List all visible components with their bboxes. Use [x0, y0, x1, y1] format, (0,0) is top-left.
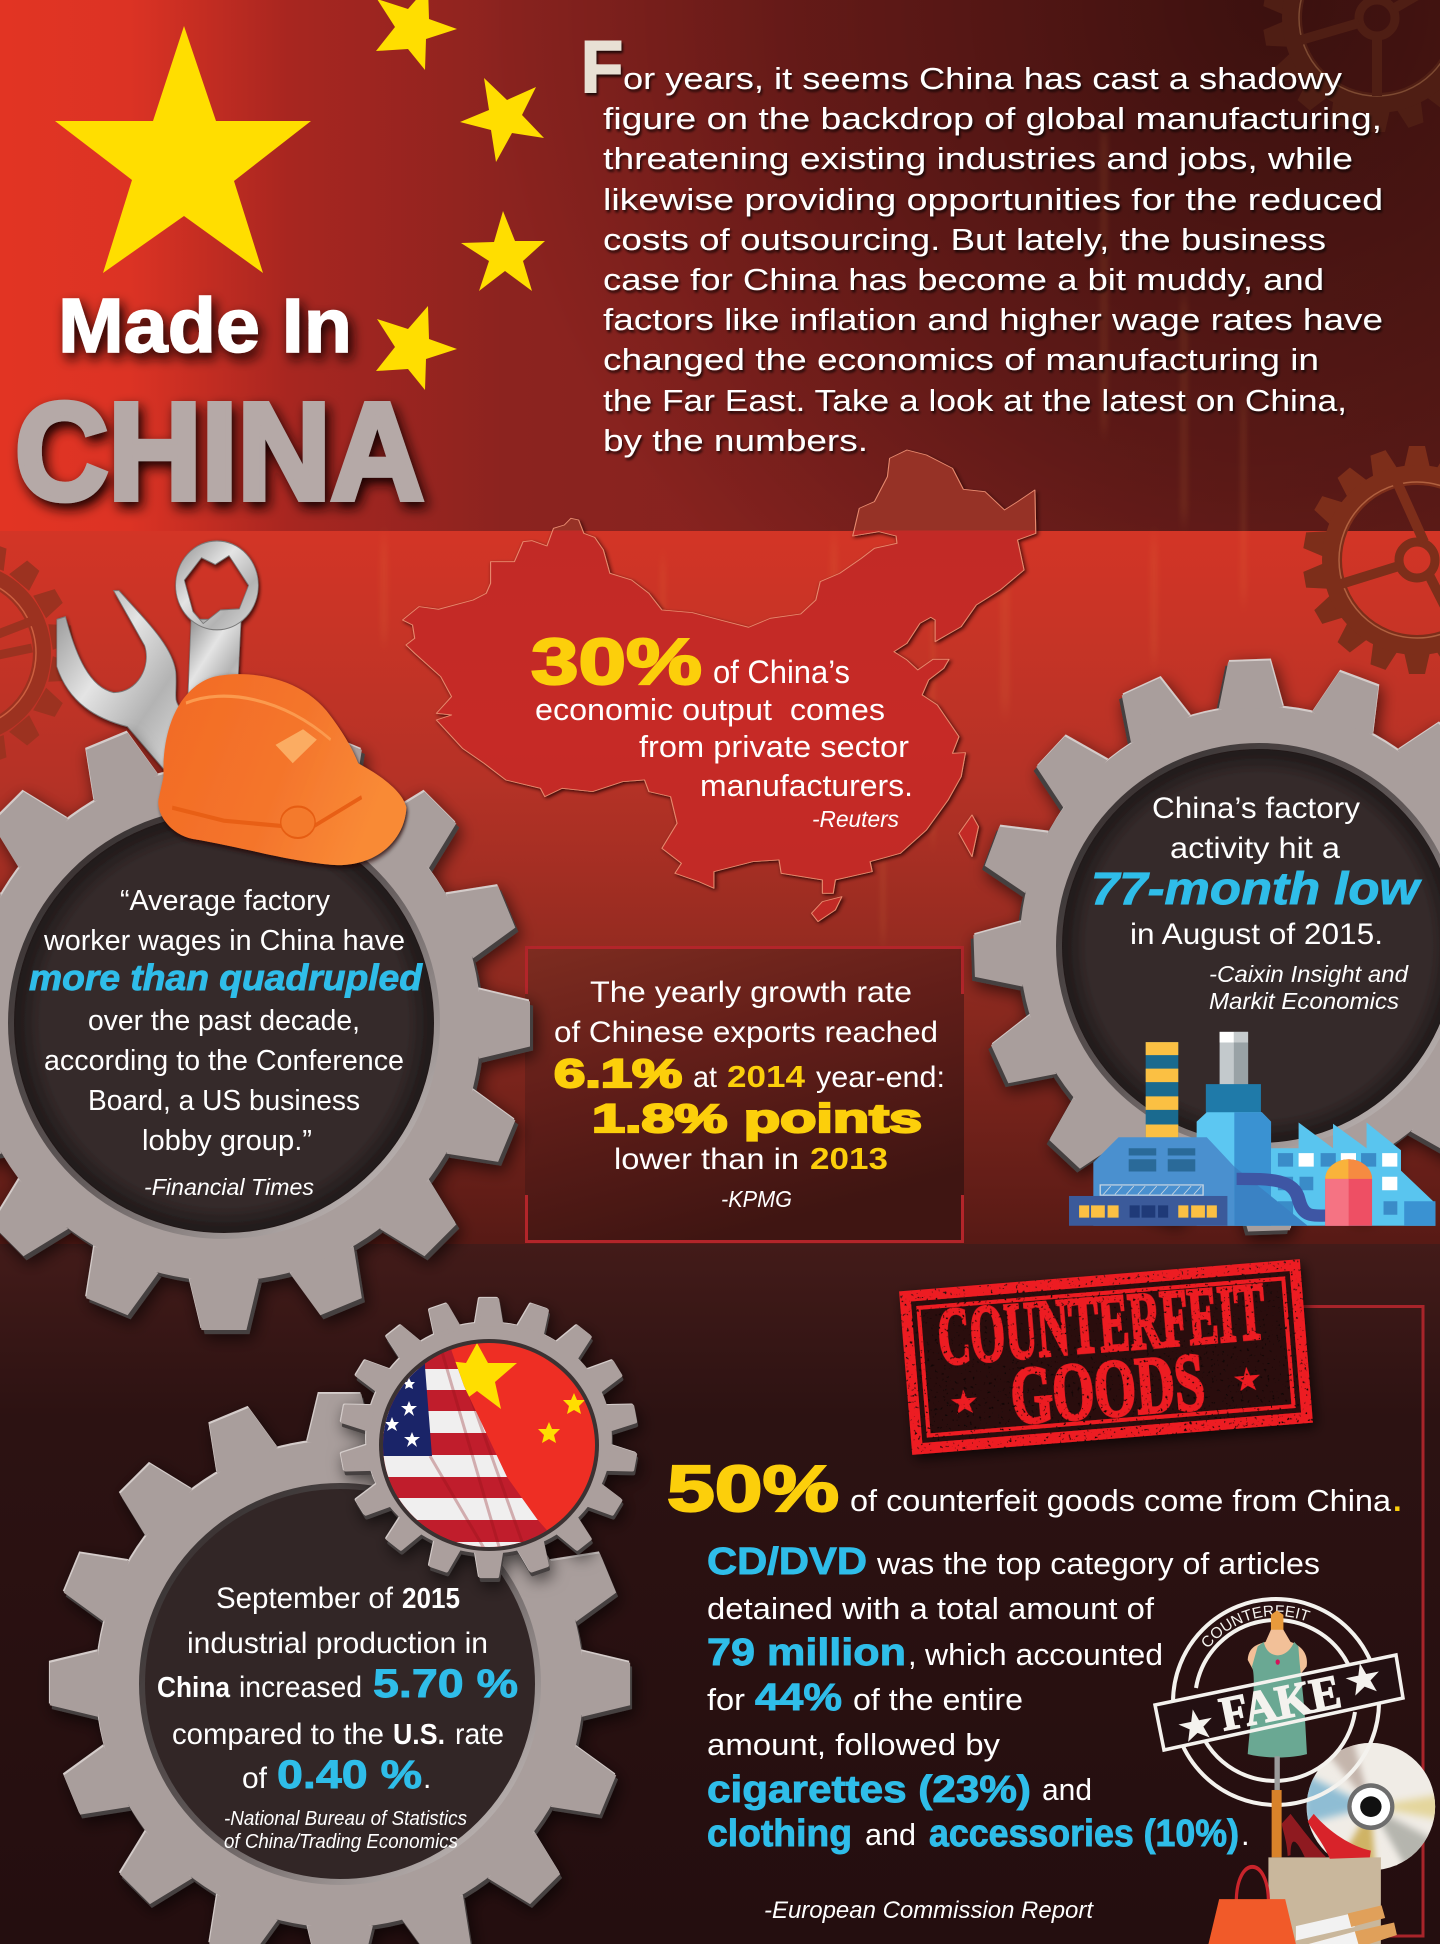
callout: counterfeit statistics: was the top category of articles	[876, 1546, 1320, 1581]
callout: counterfeit statistics: and	[1042, 1772, 1092, 1807]
callout: counterfeit statistics: -European Commission Report	[764, 1897, 1094, 1924]
island: Taiwan	[959, 815, 979, 857]
intro text block: changed the economics of manufacturing in	[603, 342, 1319, 377]
callout: industrial production: China	[157, 1672, 231, 1704]
intro text block: likewise providing opportunities for the reduced	[603, 182, 1383, 217]
intro text block: case for China has become a bit muddy, and	[603, 262, 1324, 297]
decorative gear: top right	[1262, 0, 1440, 132]
callout: export growth: of Chinese exports reached	[554, 1016, 938, 1049]
stamp ring text: COUNTERFEIT	[1202, 1605, 1311, 1646]
callout: industrial production	[157, 1582, 518, 1853]
intro text block: the Far East. Take a look at the latest on China,	[603, 383, 1347, 418]
callout: export growth: 2014	[727, 1059, 806, 1094]
flag stars	[55, 0, 545, 390]
callout: factory activity: Markit Economics	[1209, 988, 1400, 1014]
callout: counterfeit statistics: clothing	[707, 1813, 852, 1855]
callout: export growth: The yearly growth rate	[590, 976, 912, 1009]
icon: cigarettes	[1296, 1905, 1397, 1944]
title line: CHINA: CHINA	[15, 375, 424, 529]
icon: wrenches	[57, 541, 258, 771]
callout: industrial production: increased	[239, 1671, 362, 1704]
stat: 30%: 30%	[531, 625, 702, 698]
callout: private sector share: manufacturers.	[700, 768, 913, 803]
stamp: fake rings	[1171, 1597, 1381, 1807]
stamp band label	[1173, 1657, 1386, 1750]
drop cap: F	[581, 27, 623, 108]
icon: large flag star	[55, 26, 311, 273]
callout: wages: over the past decade,	[88, 1005, 360, 1037]
stat: 1.8% points: 1.8% points	[592, 1097, 922, 1141]
map of China	[403, 450, 1036, 922]
island: Hainan	[812, 897, 842, 922]
callout: private sector share: -Reuters	[812, 806, 899, 832]
title line: Made In: Made In	[58, 283, 352, 369]
callout: wages: according to the Conference	[44, 1045, 404, 1077]
callout: counterfeit statistics: for	[707, 1682, 745, 1717]
stat: 0.40 %: 0.40 %	[277, 1753, 422, 1797]
callout: industrial production: of China/Trading Economics	[224, 1831, 458, 1853]
China flag stars	[455, 1344, 584, 1443]
callout: private sector share: of China’s	[713, 654, 850, 690]
intro text block: or years, it seems China has cast a shadowy	[623, 61, 1343, 96]
intro text block: costs of outsourcing. But lately, the business	[603, 222, 1326, 257]
callout: industrial production: -National Bureau of Statistics	[224, 1808, 467, 1830]
icon: hard hat	[158, 674, 406, 865]
panel: counterfeit frame	[1290, 1306, 1423, 1936]
callout: counterfeit statistics: of counterfeit goods come from China	[850, 1483, 1392, 1518]
callout: counterfeit statistics: accessories (10%)	[929, 1813, 1239, 1855]
callout: counterfeit statistics: .	[1393, 1483, 1402, 1518]
callout: private sector share: economic output comes	[535, 692, 885, 727]
stat: 6.1%: 6.1%	[554, 1052, 682, 1096]
icon: US and China flags	[383, 1343, 595, 1547]
callout: industrial production: industrial production in	[187, 1627, 488, 1660]
callout: counterfeit statistics: cigarettes (23%)	[707, 1769, 1031, 1811]
callout: counterfeit statistics: detained with a total amount of	[707, 1591, 1154, 1626]
stamp band backing	[1155, 1655, 1403, 1750]
callout: counterfeit statistics: .	[1241, 1817, 1250, 1852]
stat: 5.70 %: 5.70 %	[373, 1662, 518, 1706]
gear: industrial production	[49, 1392, 632, 1944]
decorative gear: left	[0, 539, 75, 767]
stat: 50%: 50%	[667, 1452, 839, 1525]
callout: export growth: year-end:	[816, 1061, 945, 1094]
icon: box	[1268, 1857, 1381, 1944]
callout: industrial production: September of	[216, 1582, 394, 1615]
gear: factory wages	[0, 716, 533, 1334]
callout: counterfeit statistics	[667, 1452, 1402, 1924]
callout: factory activity	[1091, 792, 1422, 1014]
stamp band label: FAKE	[1215, 1665, 1345, 1741]
callout: wages: -Financial Times	[144, 1174, 314, 1200]
gear: flag	[341, 1299, 637, 1580]
illustration: box, shoes, bag, cigarettes	[1208, 1814, 1397, 1944]
callout: counterfeit statistics: CD/DVD	[707, 1541, 867, 1583]
callout: counterfeit statistics: 44%	[755, 1677, 842, 1719]
callout: wages: Board, a US business	[88, 1085, 360, 1117]
intro text block: factors like inflation and higher wage rates have	[603, 302, 1383, 337]
stamp star right	[1233, 1366, 1261, 1392]
striped chimney	[1146, 1042, 1178, 1140]
callout: private sector share	[531, 625, 913, 832]
callout: private sector share: from private sector	[639, 729, 909, 764]
callout: industrial production: .	[423, 1762, 431, 1795]
callout: wages	[29, 885, 423, 1200]
icon: small star 1	[376, 0, 457, 70]
callout: export growth: -KPMG	[721, 1186, 792, 1212]
callout: factory activity: -Caixin Insight and	[1209, 961, 1409, 987]
callout: export growth: at	[693, 1061, 718, 1094]
callout: export growth: 2013	[810, 1141, 888, 1176]
intro text block: threatening existing industries and jobs, while	[603, 141, 1353, 176]
highlight: more than quadrupled: more than quadrupled	[29, 957, 423, 998]
callout: wages: worker wages in China have	[43, 925, 405, 957]
icon: small star 4	[376, 306, 457, 390]
callout: export growth	[554, 976, 945, 1212]
intro text block: figure on the backdrop of global manufacturing,	[603, 101, 1382, 136]
callout: counterfeit statistics: and	[865, 1817, 916, 1852]
icon: CD	[1306, 1742, 1436, 1870]
callout: wages: lobby group.”	[142, 1125, 312, 1157]
callout: counterfeit statistics: ,	[908, 1637, 917, 1672]
icon: small star 3	[461, 211, 545, 291]
highlight: 77-month low: 77-month low	[1091, 863, 1422, 914]
icon: factory	[1069, 1032, 1435, 1226]
callout: counterfeit statistics: amount, followed by	[707, 1727, 1001, 1762]
callout: industrial production: U.S.	[393, 1719, 445, 1751]
decorative gear: middle right	[1302, 446, 1440, 674]
callout: industrial production: of	[242, 1762, 268, 1795]
stamp heading: GOODS: GOODS	[1007, 1335, 1208, 1442]
callout: factory activity: activity hit a	[1170, 832, 1340, 865]
callout: industrial production: 2015	[402, 1583, 460, 1615]
icon: mannequin	[1248, 1610, 1307, 1857]
US flag drape	[383, 1350, 547, 1547]
callout: wages: “Average factory	[120, 885, 330, 917]
callout: export growth: lower than in	[614, 1143, 799, 1176]
band mask	[1155, 1655, 1403, 1750]
stamp: counterfeit goods	[899, 1259, 1313, 1455]
callout: counterfeit statistics: 79 million	[707, 1632, 906, 1674]
callout: factory activity: in August of 2015.	[1130, 918, 1383, 951]
callout: factory activity: China’s factory	[1152, 792, 1360, 825]
stamp: fake band	[1155, 1655, 1403, 1750]
icon: handbag	[1208, 1867, 1296, 1944]
callout: counterfeit statistics: of the entire	[853, 1682, 1023, 1717]
callout: counterfeit statistics: which accounted	[924, 1637, 1163, 1672]
gear: factory activity	[961, 649, 1440, 1245]
intro text block	[581, 27, 1383, 458]
title	[15, 283, 424, 529]
callout: industrial production: rate	[455, 1718, 504, 1751]
stamp star left	[950, 1389, 978, 1415]
panel: exports box	[525, 946, 964, 1243]
icon: red shoes	[1282, 1814, 1371, 1859]
icon: small star 2	[460, 78, 544, 162]
intro text block: by the numbers.	[603, 423, 868, 458]
grey chimney	[1220, 1032, 1248, 1085]
callout: industrial production: compared to the	[172, 1718, 384, 1751]
